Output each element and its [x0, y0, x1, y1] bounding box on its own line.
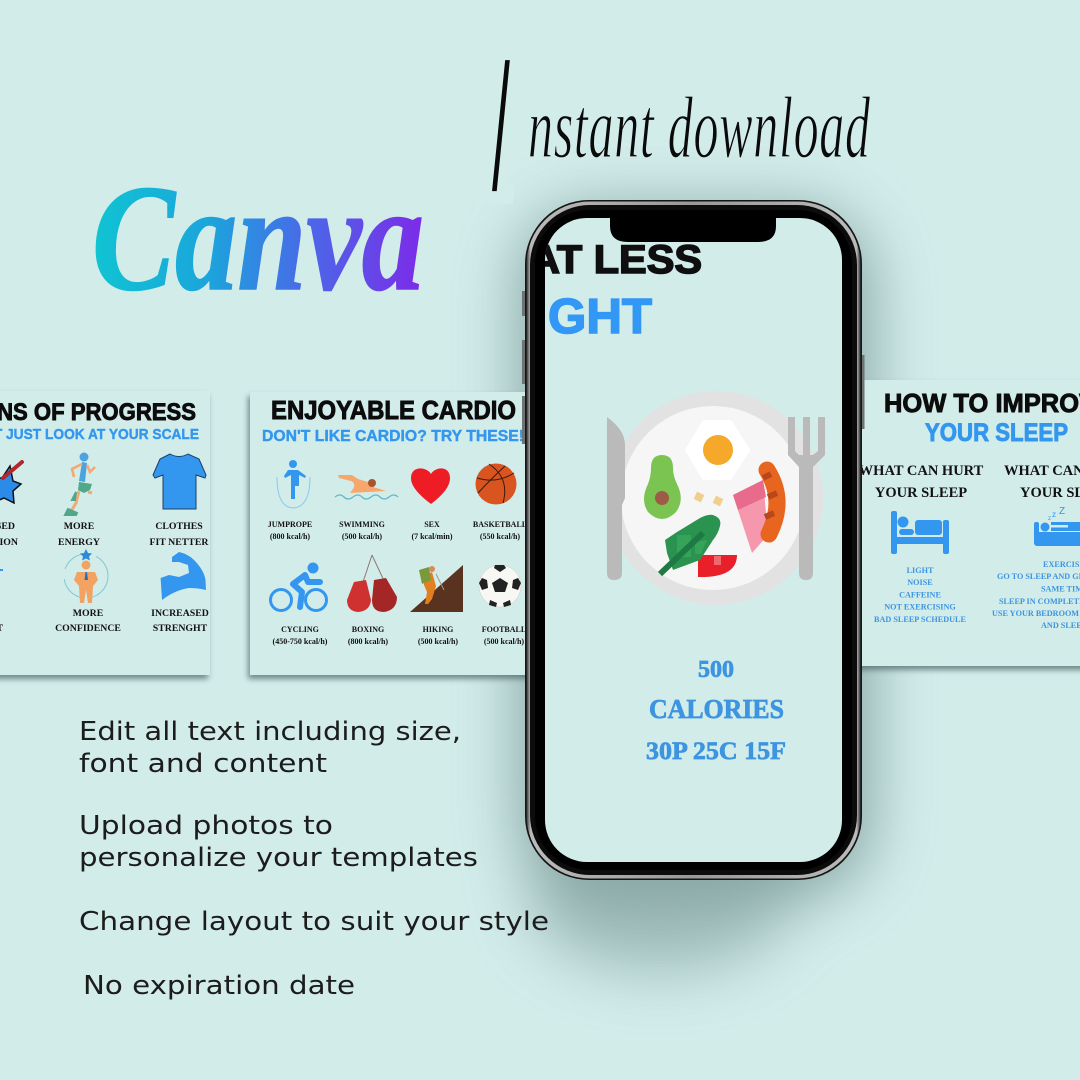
list: what can hurt: NOISE	[907, 578, 933, 587]
feature: upload photos	[79, 811, 478, 873]
calories text: 30P 25C 15F	[646, 738, 786, 765]
icon: flexed muscle	[161, 552, 206, 600]
feature: change layout: Change layout to suit your style	[79, 907, 549, 937]
screen subheading: GHT	[548, 290, 652, 344]
cardio labels row 1: JUMPROPE	[268, 520, 312, 529]
progress labels: MORE	[73, 608, 104, 619]
phone shadow	[520, 210, 870, 970]
phone body	[525, 200, 862, 880]
screen heading: eat less: AT LESS	[530, 238, 702, 282]
cardio labels row 1: (7 kcal/min)	[411, 532, 453, 541]
icon: swimmer	[335, 475, 398, 499]
list: what can hurt	[874, 566, 966, 624]
phone screen	[530, 218, 842, 862]
list: what can hurt: NOT EXERCISING	[884, 602, 956, 612]
column heading: hurt: YOUR SLEEP	[875, 485, 967, 501]
icon: bed with z letters: z	[1052, 510, 1056, 519]
calories text: 500	[698, 657, 734, 683]
Canva logo: Canva	[92, 154, 424, 322]
icon: hiker on a hill	[410, 565, 463, 612]
feature: edit text: font and content	[79, 749, 327, 779]
cardio labels row 1	[268, 520, 527, 541]
cardio labels row 2: HIKING	[423, 625, 453, 634]
cardio labels row 2: CYCLING	[281, 625, 319, 634]
icon: basketball	[476, 464, 516, 504]
icon: soccer ball	[479, 565, 521, 607]
icon: bed with z letters: Z	[1059, 506, 1065, 517]
icon: runner	[65, 452, 95, 515]
progress labels: INCREASED	[151, 608, 209, 619]
cardio labels row 1: SWIMMING	[339, 520, 385, 529]
panel title: ENJOYABLE CARDIO	[271, 397, 516, 425]
cardio labels row 1: (800 kcal/h)	[270, 532, 310, 541]
progress labels: CLOTHES	[155, 521, 203, 532]
cardio labels row 2: (450-750 kcal/h)	[273, 637, 328, 646]
list: what can hurt: BAD SLEEP SCHEDULE	[874, 615, 966, 624]
icon: bed	[891, 511, 949, 554]
progress labels: FIT NETTER	[150, 537, 209, 548]
icon: star with pen	[0, 462, 22, 503]
icon: jump rope	[277, 460, 310, 508]
icon: heart	[411, 468, 450, 504]
list: what can hurt: LIGHT	[907, 566, 934, 575]
cardio labels row 2: BOXING	[352, 625, 384, 634]
column heading: hurt: WHAT CAN HURT	[859, 463, 984, 479]
cardio labels row 2: FOOTBALL	[482, 625, 526, 634]
calories text	[646, 657, 786, 765]
cardio labels row 1: (550 kcal/h)	[480, 532, 520, 541]
list: what can hurt: CAFFEINE	[899, 590, 941, 600]
icon: boxing gloves	[347, 555, 397, 612]
icon: t-shirt	[153, 454, 206, 509]
heading: instant download: I	[477, 2, 525, 245]
cardio labels row 2: (800 kcal/h)	[348, 637, 388, 646]
feature: edit text: Edit all text including size,	[79, 717, 461, 747]
cardio labels row 1: (500 kcal/h)	[342, 532, 382, 541]
feature: upload photos: personalize your templates	[79, 843, 478, 873]
cardio labels row 1: SEX	[424, 520, 440, 529]
feature: no expiration: No expiration date	[83, 971, 355, 1001]
panel subtitle: DON'T LIKE CARDIO? TRY THESE!	[262, 428, 524, 445]
panel: signs of progress	[0, 391, 210, 675]
calories text: CALORIES	[649, 694, 784, 724]
icon: plate with food	[607, 391, 825, 605]
heading: instant download: nstant download	[528, 80, 870, 177]
icon: partial left	[0, 569, 3, 571]
icon: cycling	[270, 562, 326, 610]
feature: edit text	[79, 717, 461, 779]
phone	[522, 200, 864, 880]
feature list	[79, 717, 549, 1001]
side buttons	[522, 291, 864, 444]
phone notch	[610, 218, 776, 242]
cardio labels row 2: (500 kcal/h)	[418, 637, 458, 646]
feature: upload photos: Upload photos to	[79, 811, 333, 841]
progress labels	[0, 521, 209, 634]
progress labels: MORE	[64, 521, 95, 532]
list: what can help	[992, 560, 1080, 630]
cardio labels row 2: (500 kcal/h)	[484, 637, 524, 646]
icon: bed with z letters: z	[1048, 516, 1051, 522]
progress labels: STRENGHT	[153, 623, 208, 634]
column heading: help	[1004, 463, 1080, 501]
icon: bed with z letters	[1034, 506, 1080, 546]
cardio labels row 2	[273, 625, 526, 646]
cardio labels row 1: BASKETBALL	[473, 520, 527, 529]
progress labels: ENERGY	[58, 537, 100, 548]
panel: how to improve your sleep	[850, 380, 1080, 666]
column heading: hurt	[859, 463, 984, 501]
icon: confidence figure	[64, 549, 108, 603]
progress labels: CONFIDENCE	[55, 623, 121, 634]
panel: enjoyable cardio	[250, 392, 540, 675]
